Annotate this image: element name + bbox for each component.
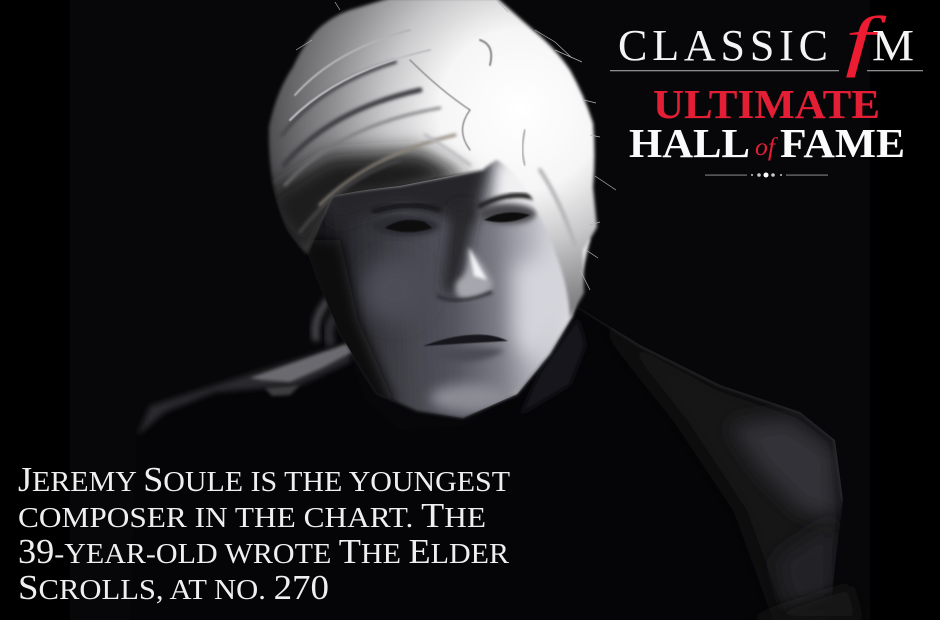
heading: Hall of Fame: of: [755, 134, 778, 161]
wordmark: Classic FM: M: [872, 21, 914, 70]
logo: Classic FM Ultimate Hall of Fame: [610, 3, 923, 178]
hair strands: [282, 30, 575, 245]
heading: Hall of Fame: FAME: [780, 120, 905, 166]
right cheek light: [515, 255, 572, 365]
jacket: [130, 305, 843, 620]
right eye socket: [480, 204, 536, 224]
ornament divider: [705, 172, 828, 178]
collar: [520, 318, 586, 415]
chin light: [430, 384, 510, 412]
right forehead light: [484, 160, 540, 218]
nostril shadow: [437, 292, 492, 300]
flyaway hairs: [296, 2, 616, 290]
wordmark: Classic FM: f: [845, 3, 887, 78]
rule right: [867, 70, 923, 71]
lower left shadow: [314, 236, 398, 402]
left cheek: [363, 258, 427, 322]
lower left hair shadow: [265, 150, 470, 262]
heading: Hall of Fame: HALL: [629, 120, 750, 166]
right eye: [484, 212, 530, 222]
nose bridge shadow: [442, 205, 476, 295]
nose: [455, 247, 493, 299]
hair: [265, 0, 616, 318]
rule left: [610, 70, 839, 71]
left eye: [385, 220, 432, 232]
left shoulder: [137, 342, 352, 436]
face: [300, 150, 590, 420]
right sleeve and shoulder: [578, 305, 843, 620]
hair lock at neck: [315, 298, 340, 342]
heading: Ultimate: ULTIMATE: [653, 81, 880, 127]
caption: Jeremy Soule fact: COMPOSER IN THE CHART. THE: [18, 496, 486, 535]
wordmark: Classic FM: CLASSIC: [618, 21, 828, 70]
left eye socket: [371, 216, 439, 236]
bottom right hand glow: [745, 585, 860, 620]
forehead shadow: [310, 160, 490, 225]
caption: Jeremy Soule fact: JEREMY SOULE IS THE YOUNGEST: [18, 460, 510, 499]
heading: Hall of Fame: [629, 120, 905, 166]
caption: Jeremy Soule fact: 39-YEAR-OLD WROTE THE ELDER: [18, 532, 510, 571]
right brow: [478, 195, 535, 207]
left brow: [372, 205, 440, 212]
mouth: [423, 335, 508, 346]
wordmark: Classic FM: [610, 3, 923, 78]
caption: Jeremy Soule fact: SCROLLS, AT NO. 270: [18, 568, 329, 607]
caption: Jeremy Soule fact: [18, 460, 510, 607]
